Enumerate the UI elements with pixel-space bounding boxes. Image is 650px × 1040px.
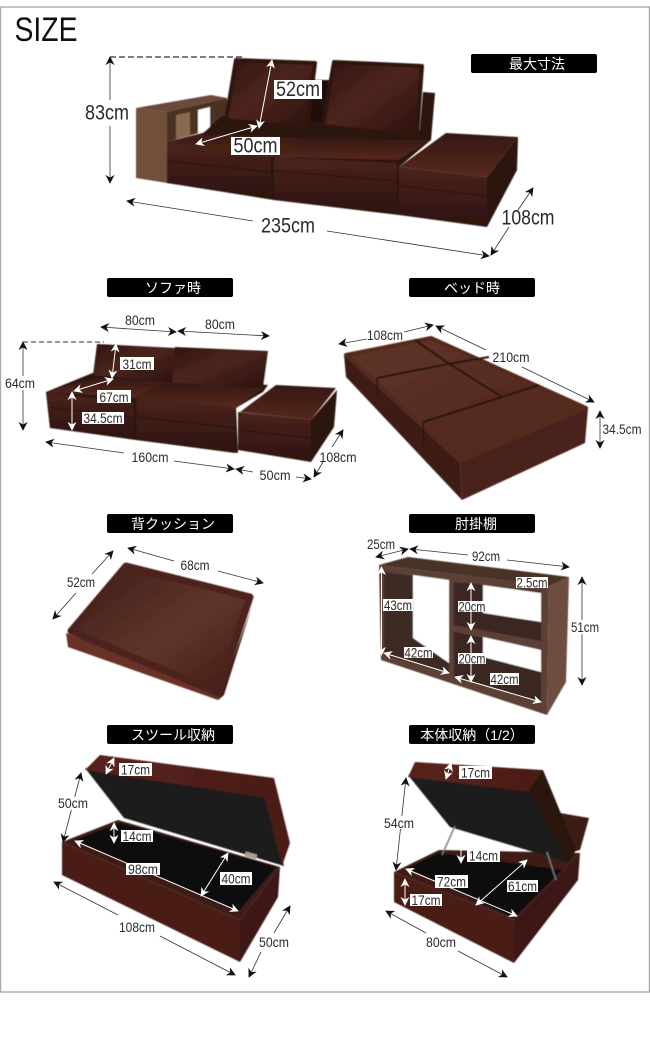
dimension: 98cm	[75, 841, 238, 911]
dimension: 34.5cm	[600, 411, 642, 448]
badge: ソファ時: ソファ時	[145, 280, 201, 296]
panel: armrest shelf	[367, 514, 601, 715]
dimension: 50cm cushion width	[196, 126, 280, 158]
dimension: 54cm: 54cm	[384, 815, 414, 831]
dimension: 50cm stool	[236, 467, 311, 483]
dimension: 17cm lid	[446, 763, 492, 780]
illustration: open stool	[62, 755, 290, 962]
badge: 本体収納（1/2）	[409, 725, 535, 744]
dimension: 67cm seat depth	[74, 379, 131, 405]
dimension: 80cm left: 80cm	[125, 312, 155, 328]
dimension: 61cm	[476, 860, 538, 905]
dimension: 14cm: 14cm	[122, 828, 152, 844]
dimension: 25cm	[367, 536, 408, 557]
dimension: 108cm depth: 108cm	[502, 206, 554, 230]
illustration: cushion	[66, 566, 254, 700]
dimension: 235cm width	[127, 201, 489, 256]
dimension: 17cm lid: 17cm	[461, 764, 490, 780]
dimension: 108cm	[339, 325, 433, 344]
dimension: 52cm	[53, 551, 113, 619]
panel: back cushion	[53, 514, 263, 700]
dimension: 25cm: 25cm	[367, 536, 395, 552]
illustration: open sofa base	[394, 762, 589, 963]
illustration: sofa without cushions	[46, 344, 337, 462]
dimension: 80cm left	[101, 312, 176, 332]
dimension: 51cm	[571, 577, 601, 685]
badge: スツール収納: スツール収納	[131, 727, 215, 743]
dimension: 40cm	[201, 853, 252, 896]
dimension: 108cm depth	[314, 430, 356, 477]
dimension: 31cm back height	[112, 344, 154, 378]
badge: ベッド時: ベッド時	[444, 280, 500, 296]
dimension: 160cm	[46, 442, 234, 469]
badge: 最大寸法: 最大寸法	[509, 56, 565, 72]
dimension: 50cm lid height	[56, 773, 88, 842]
dimension: 34.5cm: 34.5cm	[602, 421, 642, 437]
dimension: 98cm: 98cm	[128, 861, 158, 877]
badge: 最大寸法	[471, 54, 597, 73]
badge: ベッド時	[409, 278, 535, 297]
dimension: 50cm lid height: 50cm	[58, 795, 88, 811]
dimension: 108cm	[54, 882, 235, 975]
badge: ソファ時	[107, 278, 233, 297]
dimension: 50cm depth: 50cm	[259, 934, 289, 950]
dimension: 50cm depth	[249, 906, 290, 977]
dimension: 14cm	[461, 841, 500, 864]
dimension: 52cm: 52cm	[67, 574, 95, 590]
dimension: 80cm right	[178, 316, 269, 336]
panel: maximum dimensions	[85, 54, 597, 256]
dimension: 50cm cushion width: 50cm	[234, 134, 278, 158]
dimension: 50cm stool: 50cm	[260, 467, 290, 483]
dimension: 72cm: 72cm	[437, 874, 466, 890]
panel: body storage	[384, 725, 589, 977]
dimension: 235cm width: 235cm	[261, 214, 315, 238]
dimension: 14cm: 14cm	[469, 848, 498, 864]
illustration: shelf unit	[379, 557, 569, 715]
dimension: 17cm lid: 17cm	[121, 762, 150, 778]
dimension: 43cm: 43cm	[384, 597, 412, 613]
dimension: 20cm lower	[458, 636, 486, 682]
dimension: 64cm height	[4, 342, 104, 430]
dimension: 42cm left: 42cm	[404, 644, 432, 660]
dimension: 34.5cm seat height: 34.5cm	[84, 410, 122, 426]
dimension: 20cm upper	[458, 583, 486, 630]
dimension: 40cm: 40cm	[222, 870, 250, 886]
dimension: 51cm: 51cm	[571, 619, 599, 635]
dimension: 20cm lower: 20cm	[458, 650, 486, 666]
panel: sofa mode	[4, 278, 356, 483]
dimension: 2.5cm: 2.5cm	[516, 574, 548, 590]
badge: 背クッション	[107, 514, 233, 533]
dimension: 108cm: 108cm	[119, 919, 155, 935]
badge: 肘掛棚	[409, 514, 535, 533]
dimension: 54cm	[384, 778, 416, 870]
dimension: 67cm seat depth: 67cm	[100, 389, 128, 405]
dimension: 20cm upper: 20cm	[458, 598, 486, 614]
dimension: 42cm right	[455, 671, 541, 702]
dimension: 80cm: 80cm	[426, 934, 456, 950]
dimension: 160cm: 160cm	[132, 449, 168, 465]
dimension: 92cm	[410, 548, 569, 567]
dimension: 68cm: 68cm	[180, 557, 210, 573]
dimension: 17cm base	[405, 879, 442, 908]
dimension: 52cm cushion height: 52cm	[276, 78, 320, 101]
dimension: 80cm	[386, 911, 507, 977]
dimension: 64cm height: 64cm	[5, 375, 35, 391]
dimension: 42cm right: 42cm	[490, 671, 518, 687]
dimension: 17cm base: 17cm	[412, 892, 440, 908]
dimension: 108cm depth	[491, 188, 554, 255]
dimension: 52cm cushion height	[259, 60, 322, 128]
illustration: flat bed	[344, 338, 588, 500]
illustration: full sofa with shelf and stool	[136, 60, 518, 227]
dimension: 92cm: 92cm	[472, 548, 500, 564]
dimension: 68cm	[128, 548, 263, 583]
dimension: 210cm	[436, 326, 594, 402]
badge: スツール収納	[107, 725, 233, 744]
dimension: 31cm back height: 31cm	[122, 356, 152, 372]
dimension: 43cm	[382, 567, 413, 655]
dimension: 17cm lid	[106, 758, 152, 778]
dimension: 61cm: 61cm	[508, 878, 537, 894]
dimension: 72cm	[406, 869, 517, 916]
dimension: 80cm right: 80cm	[205, 316, 235, 332]
panel: stool storage	[54, 725, 290, 977]
badge: 背クッション: 背クッション	[131, 516, 215, 532]
panel: bed mode	[339, 278, 642, 500]
badge: 本体収納（1/2）: 本体収納（1/2）	[420, 727, 524, 743]
title: SIZE	[14, 11, 78, 49]
dimension: 42cm left	[384, 644, 449, 673]
dimension: 108cm depth: 108cm	[320, 449, 356, 465]
dimension: 83cm height: 83cm	[85, 102, 129, 124]
dimension: 14cm	[114, 823, 153, 844]
dimension: 210cm: 210cm	[492, 349, 530, 365]
dimension: 34.5cm seat height	[72, 392, 124, 430]
badge: 肘掛棚: 肘掛棚	[455, 516, 497, 532]
dimension: 108cm: 108cm	[367, 327, 403, 343]
